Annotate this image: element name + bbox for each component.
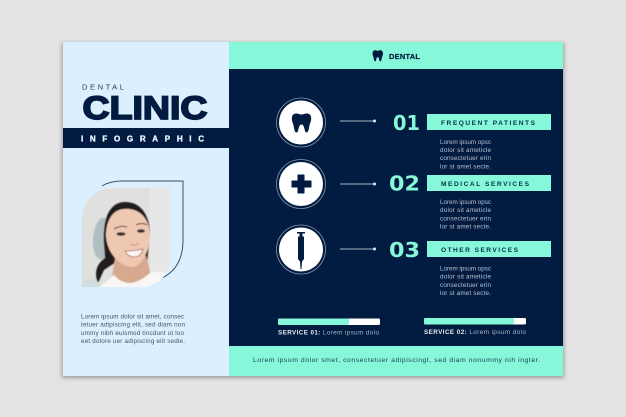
paragraph [81,314,185,345]
text: dolor sit ameticle [440,147,491,154]
smile [125,249,143,257]
text [440,199,491,231]
brows [114,224,147,229]
icon: tooth [373,50,383,62]
footer band [229,346,563,376]
text: lor st amet secte. [440,163,491,170]
text: dolor sit ameticle [440,274,491,281]
paragraph: ummy nibh euismod tincdunt ut loo [81,330,184,337]
eyes [116,232,126,236]
label: OTHER SERVICES [441,247,519,254]
panel: right [229,69,563,346]
paragraph: eet dolore uer adipiscing elit sedie. [81,338,185,345]
connector [340,248,376,250]
progress: service 01 [278,318,380,336]
label [427,114,551,130]
text: lor st amet secte. [440,290,491,297]
top [100,272,166,287]
text: lor st amet secte. [440,224,491,231]
label: dental: DENTAL [82,82,124,92]
subtitle band: INFOGRAPHIC [81,134,204,144]
number: 01 [393,111,420,135]
progress: service 02: SERVICE 02: Lorem ipsum dolo [424,329,526,336]
number: 03 [389,238,420,262]
label [427,175,551,191]
footer band: Lorem ipsum dolor smet, consectetuer adipiscingt, sed diam nonummy nih ingter. [253,357,540,364]
text: Lorem ipsum opsc [440,139,491,146]
nose [130,243,139,245]
subtitle band [63,128,229,148]
panel: left [63,42,229,376]
progress: service 02 [424,318,526,336]
paragraph: tetuer adipiscing elit, sed diam non [81,322,185,329]
header label: DENTAL [389,52,420,61]
item 3 [276,225,551,297]
text: Lorem ipsum opsc [440,199,491,206]
neck [112,256,152,286]
face [106,209,150,267]
progress: service 01: SERVICE 01: Lorem ipsum dolo [278,330,379,336]
paragraph: Lorem ipsum dolor sit amet, consec [81,314,184,320]
text: Lorem ipsum opsc [440,266,491,272]
text [440,139,491,170]
photo: smiling woman [82,188,175,290]
icon: tooth circle [276,98,326,147]
label: FREQUENT PATIENTS [441,120,536,127]
icon: cross circle [276,160,326,208]
icon: syringe circle [276,225,326,274]
title: clinic: CLINIC [82,90,208,126]
text: consectetuer erin [440,282,491,289]
label [427,241,551,257]
card shadow [62,43,564,378]
connector [340,182,376,186]
header band [229,42,563,69]
item 2 [276,160,551,231]
connector [340,120,376,122]
text: consectetuer erin [440,215,491,222]
text: dolor sit ameticle [440,207,491,214]
text [440,266,491,297]
label: MEDICAL SERVICES [441,181,530,188]
number: 02 [389,172,420,196]
photo outline [102,181,183,278]
item 1 [276,98,551,170]
cap [92,218,107,261]
ponytail and hair [96,202,150,283]
text: consectetuer erin [440,155,491,162]
